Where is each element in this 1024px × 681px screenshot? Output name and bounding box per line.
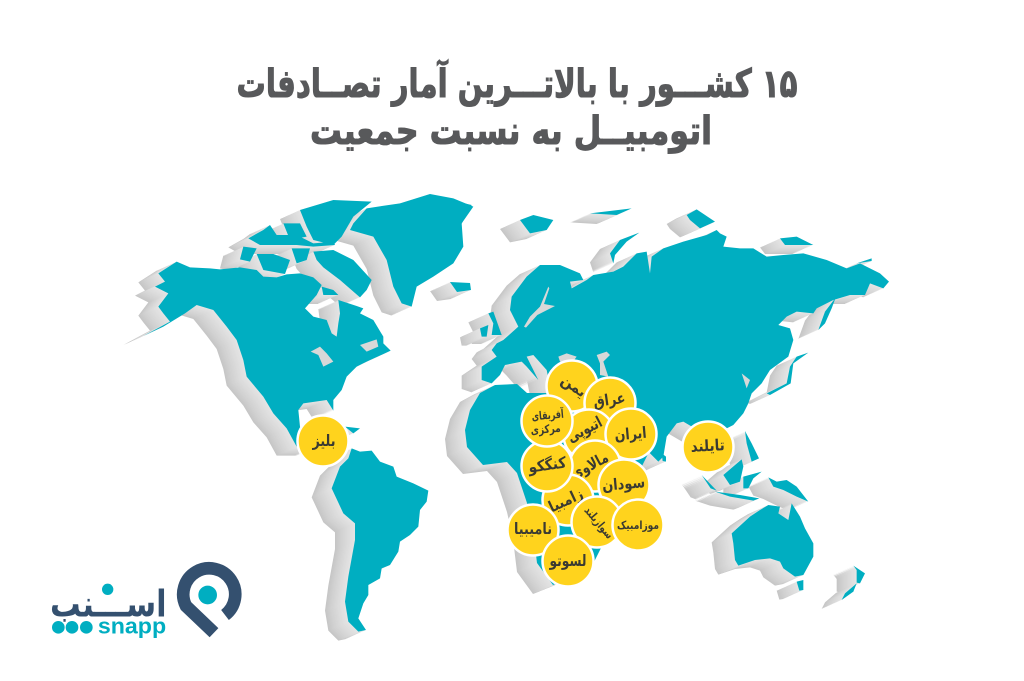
Congo: کنگکو [526,452,568,477]
Iran [606,408,656,460]
Lesotho [542,536,594,586]
Africa [465,384,650,585]
icon: map pin [183,568,235,633]
logo Persian wordmark: اســـنب [50,583,167,626]
Mozambique: موزامبیک [617,518,659,533]
Swaziland: سوازیلند [581,503,617,542]
Belize: بلیز [312,432,336,450]
Ethiopia: اتیوپی [564,413,606,447]
Thailand: تایلند [690,436,725,456]
Sudan [598,460,650,510]
Iraq: عراق [592,389,626,411]
Yemen [546,360,598,412]
Zambia [542,474,594,526]
Swaziland [572,496,622,548]
Central Africa: مرکزی [530,421,561,437]
Iran: ایران [614,424,647,444]
Iraq [584,378,636,428]
map shadow [123,194,888,641]
Central Africa [522,396,572,446]
inland seas [311,287,750,388]
Sudan: سودان [601,473,646,495]
Thailand [682,422,734,472]
Ethiopia [564,410,614,460]
Namibia: نامیبیا [514,520,552,538]
North America [143,194,473,447]
logo three dots [52,621,93,634]
Indonesia and Philippines [662,431,865,600]
Malawi: مالاوی [568,448,612,483]
Congo [522,440,572,492]
Zambia: زامبیا [546,485,586,516]
Australia [732,503,813,577]
title [237,59,798,154]
logo latin wordmark: snapp [98,613,166,638]
country bubbles [298,360,734,586]
Lesotho: لسوتو [549,552,586,570]
snapp logo [50,568,235,638]
Iceland [450,282,471,292]
Eurasia and islands [450,200,889,462]
title: اتومبیــل به نسبت جمعیت [310,109,712,154]
world map [143,194,889,632]
Central Africa: آفریقای [531,407,565,423]
title: ۱۵ کشـــور با بالاتـــرین آمار تصــادفات [237,59,798,107]
South America [332,448,428,632]
Mozambique [612,500,664,550]
logo dot [102,584,113,595]
Belize [298,416,348,466]
Yemen: یمن [558,371,590,401]
Namibia [508,504,558,556]
